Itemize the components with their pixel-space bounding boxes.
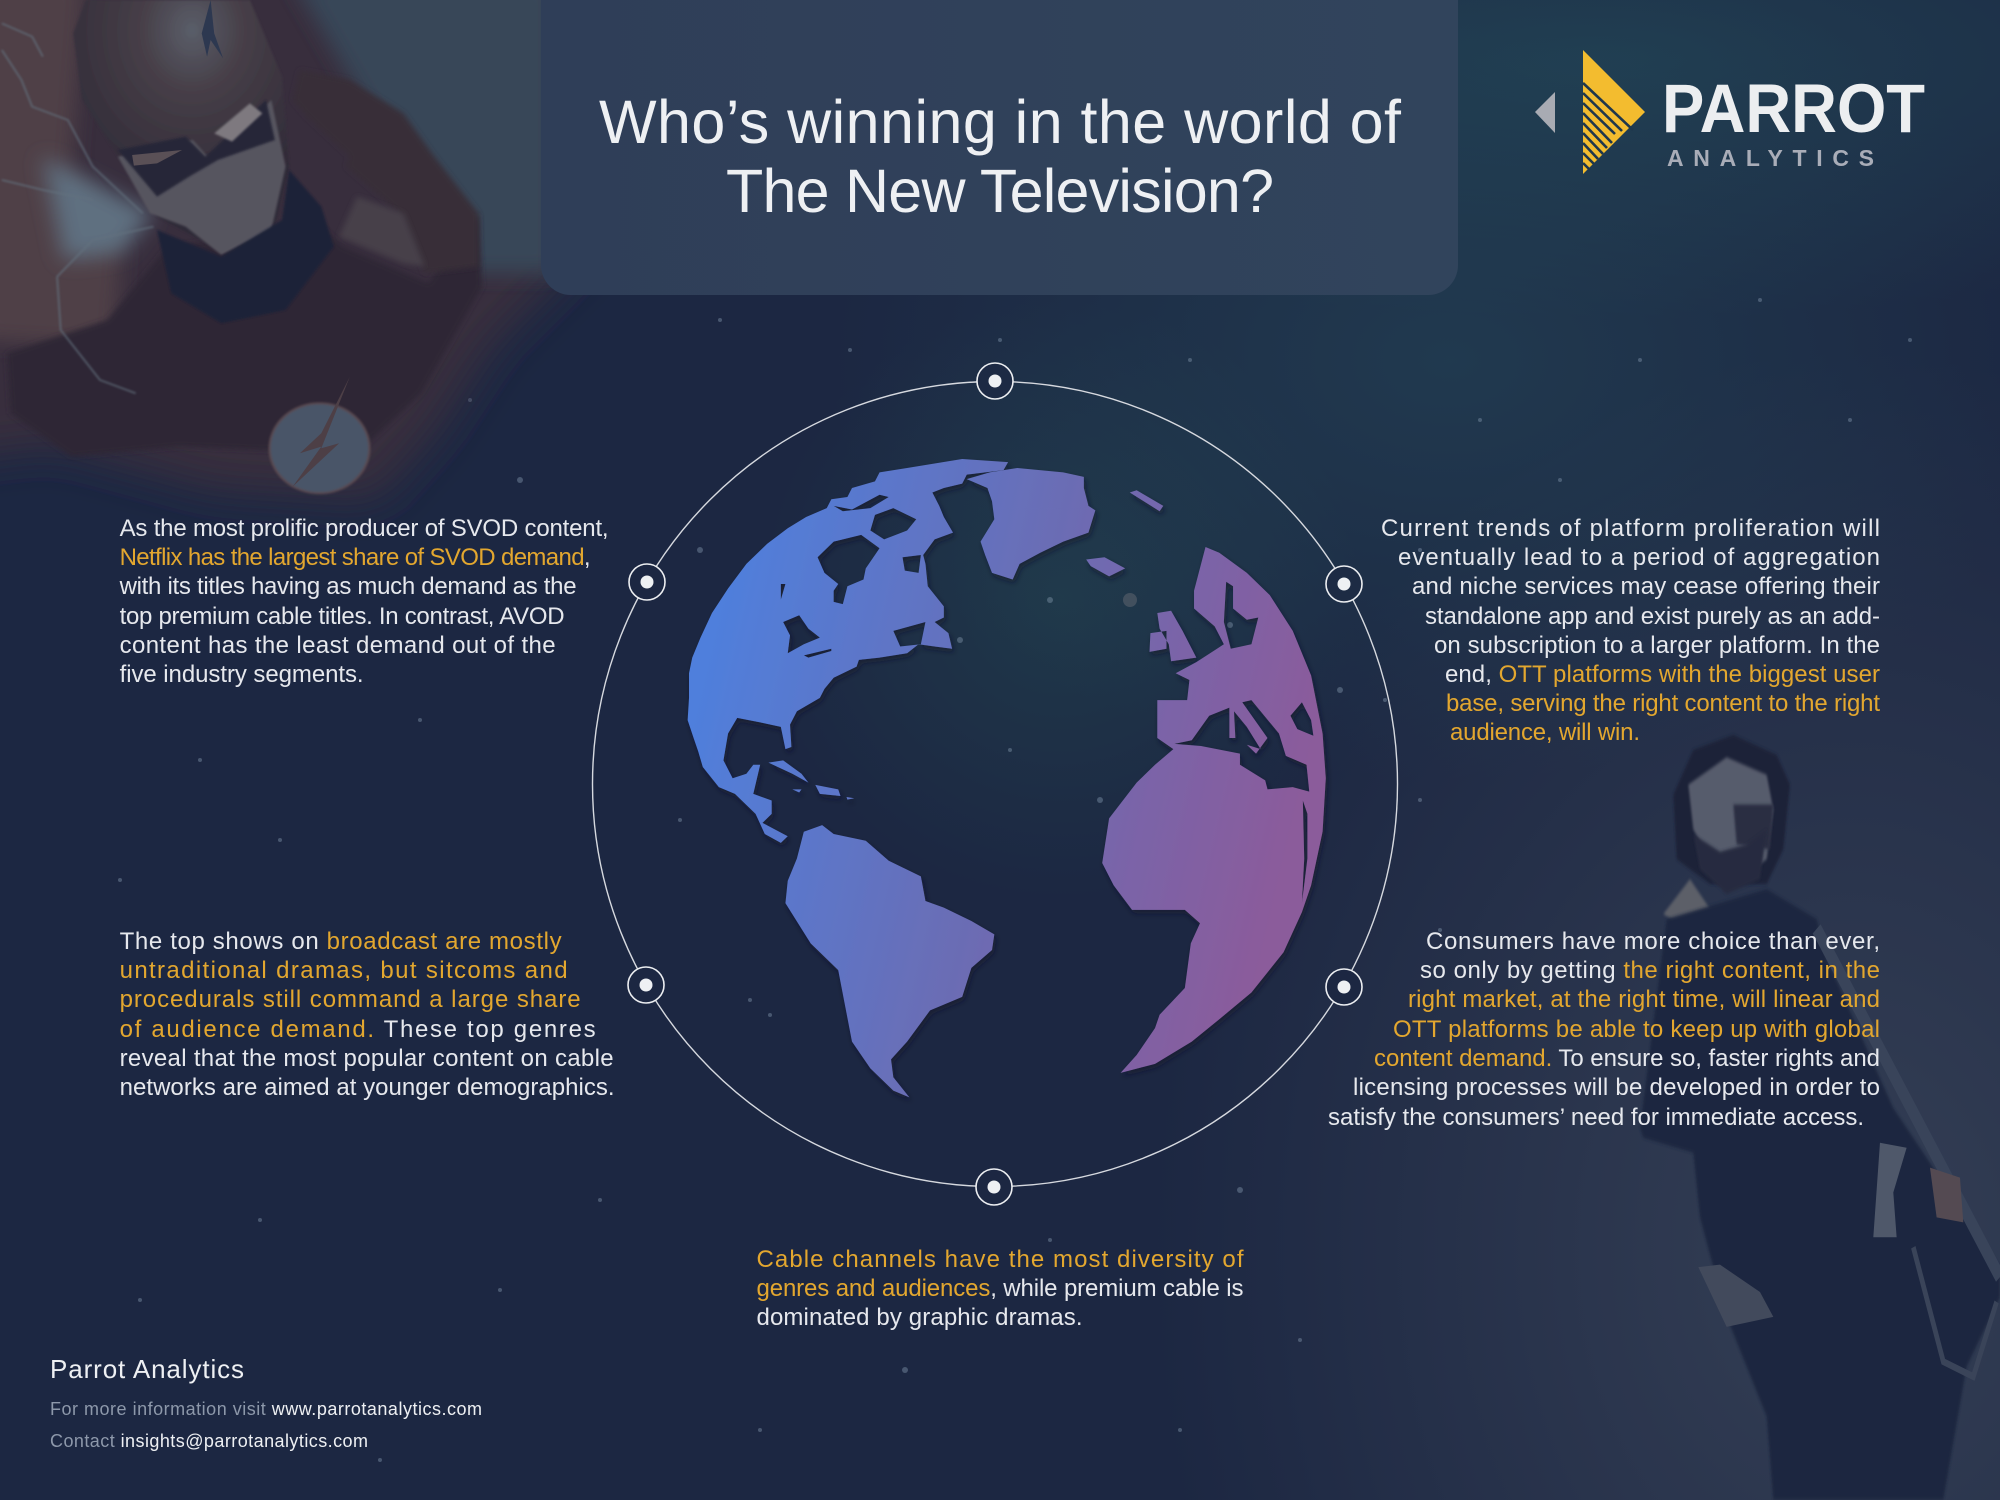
text block: consumer choice: satisfy the consumers’ need for immediate access.: [1328, 1104, 1864, 1131]
text block: platform aggregation: eventually lead to a period of aggregation: [1398, 544, 1880, 571]
text block: platform aggregation: base, serving the right content to the right: [1446, 690, 1880, 717]
text block: Netflix: [119, 515, 609, 688]
text block: cable channels: Cable channels have the most diversity of: [756, 1246, 1244, 1273]
text block: Netflix: content has the least demand out of the: [120, 632, 556, 659]
text block: consumer choice: content demand. To ensure so, faster rights and: [1374, 1045, 1880, 1072]
map: Iceland: [1086, 557, 1125, 576]
text block: broadcast: reveal that the most popular content on cable: [120, 1045, 614, 1072]
logo: Parrot Analytics: [1535, 50, 1925, 174]
text block: platform aggregation: standalone app and exist purely as an add-: [1425, 603, 1880, 630]
icon: rifle: [1817, 929, 2000, 1377]
map: Greenland: [967, 468, 1095, 580]
logo: Parrot Analytics: ANALYTICS: [1667, 145, 1874, 171]
text block: consumer choice: right market, at the right time, will linear and: [1408, 986, 1880, 1013]
map: Caribbean islands: [768, 760, 854, 800]
text block: cable channels: dominated by graphic dramas.: [756, 1304, 1082, 1331]
illustration: superhero in red suit, top left: [0, 0, 585, 500]
text block: platform aggregation: and niche services may cease offering their: [1412, 573, 1880, 600]
text block: Netflix: top premium cable titles. In contrast, AVOD: [120, 603, 565, 630]
map: Svalbard: [1130, 490, 1163, 511]
text block: consumer choice: Consumers have more choice than ever,: [1426, 928, 1880, 955]
text block: platform aggregation: audience, will win.: [1450, 719, 1640, 746]
text block: consumer choice: [1328, 928, 1880, 1131]
icon: lightning chest emblem: [270, 377, 369, 493]
footer: contact: For more information visit www.parrotanalytics.com: [50, 1399, 482, 1419]
text block: broadcast: networks are aimed at younger demographics.: [120, 1074, 615, 1101]
text block: broadcast: of audience demand. These top genres: [120, 1016, 596, 1043]
text block: consumer choice: OTT platforms be able to keep up with global: [1393, 1016, 1880, 1043]
text block: broadcast: procedurals still command a large share: [120, 986, 581, 1013]
text block: broadcast: [120, 928, 615, 1101]
text block: Netflix: five industry segments.: [120, 661, 364, 688]
node: top: [977, 363, 1013, 399]
footer: contact: Parrot Analytics: [50, 1354, 244, 1384]
text block: consumer choice: licensing processes will be developed in order to: [1353, 1074, 1880, 1101]
text block: cable channels: genres and audiences, while premium cable is: [756, 1275, 1244, 1302]
footer: contact: [50, 1354, 482, 1451]
illustration: bearded man with rifle, bottom right: [1640, 735, 2000, 1500]
illustration: starfield: [118, 298, 1912, 1462]
text block: broadcast: untraditional dramas, but sitcoms and: [120, 957, 568, 984]
map: Europe and Africa: [1102, 547, 1326, 1073]
node: upper right: [1326, 566, 1362, 602]
logo: Parrot Analytics: PARROT: [1662, 70, 1925, 147]
title: The New Television?: [726, 157, 1274, 225]
map: South America: [785, 825, 994, 1097]
text block: platform aggregation: on subscription to a larger platform. In the: [1434, 632, 1880, 659]
icon: grey back triangle: [1535, 92, 1555, 133]
ring with nodes: [592, 363, 1398, 1205]
text block: cable channels: [756, 1246, 1244, 1331]
text block: consumer choice: so only by getting the right content, in the: [1420, 957, 1880, 984]
text block: platform aggregation: Current trends of platform proliferation will: [1381, 515, 1880, 542]
text block: platform aggregation: [1381, 515, 1880, 746]
text block: broadcast: The top shows on broadcast are mostly: [120, 928, 562, 955]
title: Who’s winning in the world of: [599, 88, 1402, 156]
text block: platform aggregation: end, OTT platforms with the biggest user: [1445, 661, 1880, 688]
node: lower left: [628, 967, 664, 1003]
node: lower right: [1326, 969, 1362, 1005]
globe map: [688, 459, 1326, 1097]
node: upper left: [629, 564, 665, 600]
map: North America: [688, 459, 1008, 843]
text block: Netflix: As the most prolific producer of SVOD content,: [120, 515, 609, 542]
map: British Isles: [1150, 611, 1196, 661]
footer: contact: Contact insights@parrotanalytics.com: [50, 1431, 368, 1451]
panel: title background: [541, 0, 1458, 295]
text block: Netflix: Netflix has the largest share of SVOD demand,: [120, 544, 591, 571]
text block: Netflix: with its titles having as much demand as the: [119, 573, 577, 600]
icon: yellow stripe triangle: [1583, 50, 1645, 174]
node: bottom: [976, 1169, 1012, 1205]
title: [599, 88, 1402, 225]
